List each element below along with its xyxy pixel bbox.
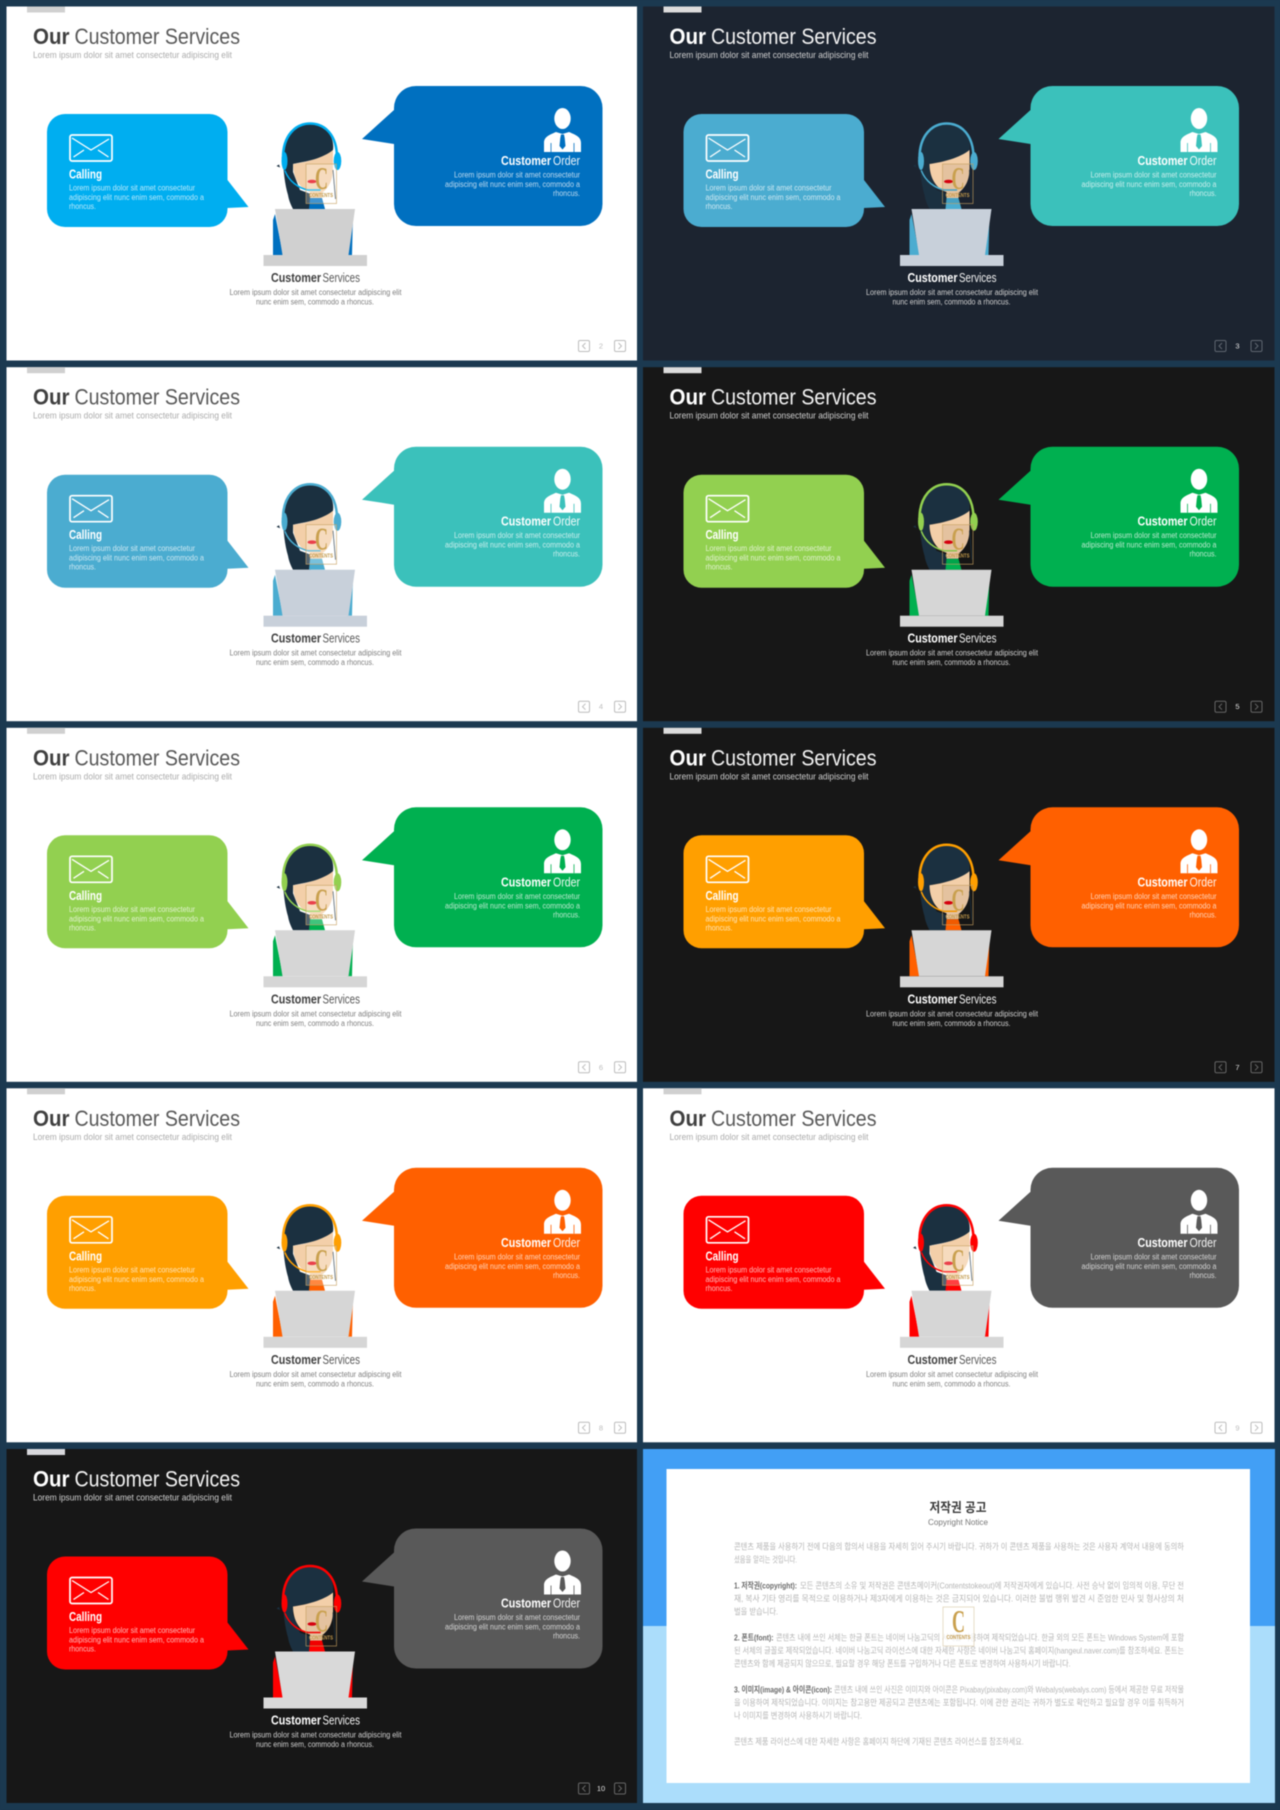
calling text: adipiscing elit nunc enim sem, commodo a (69, 914, 204, 923)
pagination: 6 (599, 1063, 603, 1072)
icon: envelope (706, 1217, 748, 1243)
speech bubble: customer order (998, 1168, 1239, 1308)
customer order text (445, 154, 580, 198)
customer services caption: Lorem ipsum dolor sit amet consectetur adipiscing elit (866, 649, 1039, 658)
customer order text: Lorem ipsum dolor sit amet consectetur (1090, 1252, 1217, 1261)
icon: envelope (70, 135, 112, 161)
copyright clause 1: 벌을 받습니다. (734, 1607, 778, 1617)
pagination (578, 701, 626, 712)
customer services caption: nunc enim sem, commodo a rhoncus. (256, 1019, 374, 1028)
customer order text: adipiscing elit nunc enim sem, commodo a (445, 901, 580, 910)
calling text (706, 528, 841, 572)
subtitle: Lorem ipsum dolor sit amet consectetur adipiscing elit (670, 50, 869, 61)
calling text: Calling (69, 1610, 102, 1624)
watermark (306, 1242, 336, 1285)
customer order text: Order (1190, 1236, 1216, 1250)
customer order text: Customer (1138, 1236, 1188, 1250)
speech bubble: calling (684, 835, 885, 948)
slide 6: white with green bubbles (6, 728, 637, 1082)
icon: businessman (1180, 469, 1218, 513)
customer services caption: Customer (908, 992, 958, 1006)
speech bubble: calling (47, 114, 248, 227)
calling text: adipiscing elit nunc enim sem, commodo a (69, 554, 204, 563)
subtitle: Lorem ipsum dolor sit amet consectetur adipiscing elit (33, 411, 232, 422)
customer order text (1082, 154, 1217, 198)
calling text (706, 168, 841, 211)
calling text: adipiscing elit nunc enim sem, commodo a (69, 193, 204, 202)
customer services caption (230, 1714, 402, 1749)
watermark: C (952, 521, 964, 557)
illustration: call-centre agent at laptop (264, 1205, 367, 1348)
customer order text: Customer (501, 154, 551, 168)
copyright clause 3 (734, 1684, 1184, 1720)
customer order text: adipiscing elit nunc enim sem, commodo a (1082, 901, 1217, 910)
icon: businessman (1180, 829, 1218, 873)
customer order text (445, 1596, 580, 1640)
customer order text: Lorem ipsum dolor sit amet consectetur (454, 892, 580, 901)
pagination: 9 (1235, 1423, 1240, 1432)
customer services caption: Lorem ipsum dolor sit amet consectetur adipiscing elit (230, 1730, 402, 1740)
customer order text: adipiscing elit nunc enim sem, commodo a (1082, 180, 1217, 189)
subtitle: Lorem ipsum dolor sit amet consectetur adipiscing elit (670, 411, 869, 422)
icon: businessman (544, 1190, 581, 1234)
copyright heading: Copyright Notice (928, 1517, 988, 1527)
customer services caption: Customer (908, 1353, 958, 1367)
watermark (942, 1242, 973, 1285)
illustration: call-centre agent at laptop (264, 1566, 367, 1708)
heading: Our (33, 1466, 70, 1492)
copyright clause 1 (734, 1581, 1184, 1617)
speech bubble: customer order (998, 86, 1239, 226)
customer order text: Order (553, 154, 580, 168)
calling text: adipiscing elit nunc enim sem, commodo a (706, 193, 841, 202)
watermark (943, 1603, 974, 1646)
customer services caption: Customer (271, 1714, 321, 1728)
customer services caption: Customer (908, 271, 958, 285)
heading: Our (33, 1106, 70, 1131)
calling text: adipiscing elit nunc enim sem, commodo a (69, 1275, 204, 1284)
customer order text: Customer (1138, 515, 1188, 529)
calling text: adipiscing elit nunc enim sem, commodo a (706, 914, 841, 923)
heading: Customer Services (711, 385, 876, 410)
icon: envelope (70, 496, 112, 522)
customer order text: Lorem ipsum dolor sit amet consectetur (1090, 531, 1217, 540)
calling text (69, 889, 204, 932)
pagination: 8 (599, 1423, 603, 1432)
speech bubble: customer order (998, 447, 1239, 587)
calling text (706, 1249, 841, 1293)
customer order text: rhoncus. (553, 910, 580, 919)
pagination: 2 (599, 342, 603, 350)
customer services caption: Services (959, 992, 996, 1006)
heading: Customer Services (74, 385, 240, 410)
calling text (706, 889, 841, 932)
subtitle: Lorem ipsum dolor sit amet consectetur adipiscing elit (670, 1132, 869, 1143)
customer services caption: nunc enim sem, commodo a rhoncus. (892, 658, 1010, 667)
customer order text: rhoncus. (1190, 550, 1216, 559)
pagination (578, 1062, 626, 1073)
pagination (1215, 1422, 1262, 1433)
customer services caption: Lorem ipsum dolor sit amet consectetur adipiscing elit (866, 1009, 1039, 1018)
customer order text: Order (553, 1236, 580, 1250)
illustration: call-centre agent at laptop (900, 124, 1004, 266)
customer order text: adipiscing elit nunc enim sem, commodo a (1082, 1262, 1217, 1271)
copyright clause 2: 된 서체의 글꼴로 제작되었습니다. 네이버 나눔고딕 라이선스에 대한 자세한 사항은 네이버 나눔고딕 홈페이지(hangeul.naver.com)를 참조하세요. 폰트는 (734, 1646, 1184, 1656)
customer services caption: Services (322, 632, 360, 646)
speech bubble: calling (684, 1196, 885, 1309)
copyright clause 1: 재, 복사 기타 영리를 목적으로 이용하거나 제3자에게 이용하는 것은 금지되어 있습니다. 이러한 불법 행위 발견 시 준엄한 민사 및 형사상의 처 (734, 1593, 1184, 1603)
watermark: CONTENTS (946, 193, 970, 199)
icon: businessman (544, 829, 581, 873)
heading: Our (670, 1106, 706, 1131)
speech bubble: calling (684, 475, 885, 588)
customer order text: Customer (501, 515, 551, 529)
pagination: 4 (599, 702, 603, 711)
calling text: adipiscing elit nunc enim sem, commodo a (706, 554, 841, 563)
calling text (69, 1249, 204, 1293)
copyright clause 3: 콘텐츠 내에 쓰인 사진은 이미지와 아이콘은 Pixabay(pixabay.com)와 Webalys(webalys.com) 등에서 제공한 무료 저작물 (834, 1684, 1184, 1694)
speech bubble: customer order (362, 447, 602, 587)
heading: Our (33, 24, 70, 49)
customer services caption: Lorem ipsum dolor sit amet consectetur adipiscing elit (866, 288, 1039, 297)
watermark: C (315, 1602, 328, 1638)
copyright clause 2 (734, 1633, 1184, 1668)
illustration: call-centre agent at laptop (900, 484, 1004, 627)
watermark: CONTENTS (309, 914, 333, 920)
heading: Customer Services (711, 24, 876, 49)
watermark: C (952, 881, 964, 917)
watermark (942, 160, 973, 204)
watermark (306, 160, 336, 204)
heading: Customer Services (74, 24, 240, 49)
heading: Customer Services (74, 1106, 240, 1131)
customer order text: rhoncus. (1190, 1271, 1216, 1280)
customer order text: Order (553, 1596, 580, 1610)
customer services caption: nunc enim sem, commodo a rhoncus. (256, 1740, 374, 1749)
slide 3: dark with teal bubbles (643, 6, 1274, 360)
copyright footer note: 콘텐츠 제품 라이선스에 대한 자세한 사항은 홈페이지 하단에 기재된 콘텐츠 라이선스를 참조하세요. (734, 1737, 1024, 1747)
customer order text: Customer (501, 875, 551, 889)
watermark (942, 521, 973, 564)
heading: Our (670, 385, 706, 410)
customer order text: Customer (501, 1236, 551, 1250)
icon: businessman (544, 1550, 581, 1594)
watermark: CONTENTS (309, 554, 333, 560)
heading: Customer Services (711, 1106, 876, 1131)
subtitle: Lorem ipsum dolor sit amet consectetur adipiscing elit (33, 1132, 232, 1143)
watermark: CONTENTS (309, 193, 333, 199)
copyright clause 2: 콘텐츠 내에 쓰인 서체는 한글 폰트는 네이버 나눔고딕의 서체를 사용하여 제작되었습니다. 한글 외의 모든 폰트는 Windows System에 포함 (776, 1633, 1184, 1643)
customer order text: Lorem ipsum dolor sit amet consectetur (454, 1252, 580, 1261)
calling text: Calling (706, 889, 738, 903)
customer services caption (866, 1353, 1039, 1388)
customer order text: adipiscing elit nunc enim sem, commodo a (445, 1262, 580, 1271)
watermark: C (315, 881, 328, 917)
speech bubble: calling (47, 1196, 248, 1309)
copyright clause 2: 2. 폰트(font): (734, 1633, 774, 1643)
customer services caption: Lorem ipsum dolor sit amet consectetur adipiscing elit (230, 288, 402, 297)
copyright clause 3: 3. 이미지(image) & 아이콘(icon): (734, 1684, 832, 1694)
speech bubble: calling (684, 114, 885, 227)
calling text: adipiscing elit nunc enim sem, commodo a (706, 1275, 841, 1284)
customer order text (1082, 875, 1217, 919)
customer order text: Order (553, 875, 580, 889)
pagination (1215, 701, 1262, 712)
watermark (306, 881, 336, 925)
customer order text (1082, 1236, 1217, 1280)
copyright heading: 저작권 공고 (930, 1500, 987, 1515)
customer services caption: Customer (271, 1353, 321, 1367)
watermark: C (315, 521, 328, 557)
customer services caption: nunc enim sem, commodo a rhoncus. (256, 1379, 374, 1388)
heading: Customer Services (74, 1466, 240, 1492)
icon: envelope (70, 1578, 112, 1604)
calling text (69, 1610, 204, 1654)
customer order text: rhoncus. (553, 1632, 580, 1640)
calling text: Calling (706, 528, 738, 542)
speech bubble: customer order (998, 807, 1239, 947)
illustration: call-centre agent at laptop (264, 845, 367, 987)
customer services caption: Services (322, 992, 360, 1006)
calling text: Lorem ipsum dolor sit amet consectetur (69, 184, 195, 192)
watermark (942, 881, 973, 925)
calling text: Lorem ipsum dolor sit amet consectetur (69, 1265, 195, 1274)
customer services caption (866, 271, 1039, 306)
customer services caption: nunc enim sem, commodo a rhoncus. (256, 658, 374, 667)
customer services caption: Services (322, 1714, 360, 1728)
illustration: call-centre agent at laptop (900, 1205, 1004, 1348)
watermark: C (952, 160, 964, 196)
customer order text: Customer (1138, 875, 1188, 889)
pagination: 7 (1235, 1063, 1240, 1072)
customer order text: adipiscing elit nunc enim sem, commodo a (445, 541, 580, 550)
speech bubble: calling (47, 1556, 248, 1670)
customer services caption: Services (959, 632, 996, 646)
speech bubble: customer order (362, 1168, 602, 1308)
icon: envelope (706, 496, 748, 522)
heading: Our (33, 385, 70, 410)
calling text: Calling (69, 889, 102, 903)
customer order text: Order (1190, 154, 1216, 168)
watermark: CONTENTS (946, 914, 970, 920)
customer order text (445, 1236, 580, 1280)
pagination: 3 (1235, 342, 1240, 350)
customer order text: rhoncus. (1190, 189, 1216, 198)
customer order text: Lorem ipsum dolor sit amet consectetur (454, 1613, 580, 1622)
customer order text: rhoncus. (553, 189, 580, 198)
copyright clause 1: 1. 저작권(copyright): (734, 1581, 797, 1591)
watermark: CONTENTS (309, 1636, 333, 1642)
customer services caption: Lorem ipsum dolor sit amet consectetur adipiscing elit (230, 1370, 402, 1379)
customer services caption: Customer (908, 632, 958, 646)
customer services caption (230, 1353, 402, 1388)
icon: businessman (1180, 1190, 1218, 1234)
illustration: call-centre agent at laptop (264, 484, 367, 627)
panel: copyright notice (643, 1449, 1275, 1803)
heading: Our (670, 24, 706, 49)
pagination: 10 (597, 1784, 605, 1793)
subtitle: Lorem ipsum dolor sit amet consectetur adipiscing elit (33, 1492, 232, 1504)
customer services caption (230, 992, 402, 1028)
calling text: rhoncus. (706, 563, 732, 572)
subtitle: Lorem ipsum dolor sit amet consectetur adipiscing elit (33, 771, 232, 782)
customer order text: adipiscing elit nunc enim sem, commodo a (445, 1622, 580, 1632)
calling text: adipiscing elit nunc enim sem, commodo a (69, 1636, 204, 1644)
customer order text: rhoncus. (553, 550, 580, 559)
copyright heading (928, 1500, 988, 1527)
customer order text: Lorem ipsum dolor sit amet consectetur (454, 170, 580, 180)
calling text: rhoncus. (69, 923, 96, 932)
customer order text (445, 875, 580, 919)
customer order text: Customer (1138, 154, 1188, 168)
copyright clause 1: 모든 콘텐츠의 소유 및 저작권은 콘텐츠메이커(Contentstokeout)에 저작권자에게 있습니다. 사전 승낙 없이 임의적 이용, 무단 전 (800, 1581, 1184, 1591)
customer order text: adipiscing elit nunc enim sem, commodo a (445, 180, 580, 189)
pagination (1215, 1062, 1262, 1073)
customer order text: Order (1190, 515, 1216, 529)
customer services caption (866, 992, 1039, 1028)
customer order text (445, 515, 580, 559)
slide 9: white with red and grey bubbles (643, 1088, 1274, 1442)
customer services caption: Services (959, 271, 996, 285)
calling text: Calling (706, 1249, 738, 1263)
watermark (306, 521, 336, 564)
customer services caption (230, 271, 402, 306)
customer order text: Customer (501, 1596, 551, 1610)
customer services caption: nunc enim sem, commodo a rhoncus. (256, 298, 374, 306)
watermark: CONTENTS (946, 1275, 970, 1281)
calling text (69, 528, 204, 572)
calling text: Lorem ipsum dolor sit amet consectetur (69, 905, 195, 914)
subtitle: Lorem ipsum dolor sit amet consectetur adipiscing elit (670, 771, 869, 782)
customer services caption: nunc enim sem, commodo a rhoncus. (892, 298, 1010, 306)
watermark (306, 1602, 336, 1646)
copyright intro (734, 1542, 1184, 1564)
watermark: C (315, 1242, 328, 1278)
icon: businessman (1180, 108, 1218, 152)
customer services caption: nunc enim sem, commodo a rhoncus. (892, 1379, 1010, 1388)
calling text: rhoncus. (69, 1284, 96, 1293)
calling text: rhoncus. (706, 202, 732, 211)
calling text: Lorem ipsum dolor sit amet consectetur (69, 544, 195, 553)
pagination: 5 (1235, 702, 1240, 711)
slide 5: dark with green bubbles (643, 367, 1274, 721)
copyright intro: 콘텐츠 제품을 사용하기 전에 다음의 합의서 내용을 자세히 읽어 주시기 바랍니다. 귀하가 이 콘텐츠 제품을 사용하는 것은 사용자 계약서 내용에 동의하 (734, 1542, 1184, 1552)
calling text: Calling (69, 1249, 102, 1263)
customer services caption: Services (322, 271, 360, 285)
watermark: CONTENTS (946, 554, 970, 560)
heading: Customer Services (711, 745, 876, 770)
calling text: Calling (69, 528, 102, 542)
customer order text: Order (1190, 875, 1216, 889)
speech bubble: calling (47, 835, 248, 948)
icon: envelope (706, 856, 748, 882)
watermark: CONTENTS (946, 1635, 971, 1641)
watermark: C (952, 1242, 964, 1278)
watermark: CONTENTS (309, 1275, 333, 1281)
heading: Customer Services (74, 745, 240, 770)
customer services caption: Lorem ipsum dolor sit amet consectetur adipiscing elit (866, 1370, 1039, 1379)
illustration: call-centre agent at laptop (264, 124, 367, 266)
calling text: rhoncus. (69, 1644, 96, 1654)
icon: businessman (544, 469, 581, 513)
pagination (578, 1422, 626, 1433)
calling text: Lorem ipsum dolor sit amet consectetur (706, 905, 832, 914)
customer services caption (230, 632, 402, 667)
copyright clause 3: 을 이용하여 제작되었습니다. 이미지는 참고용만 제공되고 콘텐츠에는 포함됩니다. 이에 관한 권리는 귀하가 별도로 확인하고 필요할 경우 이를 취득하거 (734, 1697, 1184, 1707)
customer services caption: Services (322, 1353, 360, 1367)
customer services caption (866, 632, 1039, 667)
pagination (1215, 340, 1262, 352)
customer services caption: Lorem ipsum dolor sit amet consectetur adipiscing elit (230, 1009, 402, 1018)
customer order text (1082, 515, 1217, 559)
calling text: rhoncus. (706, 1284, 732, 1293)
slide 10: dark with red and grey bubbles (6, 1449, 637, 1803)
slide 8: white with orange bubbles (6, 1088, 637, 1442)
calling text: rhoncus. (706, 923, 732, 932)
customer order text: Lorem ipsum dolor sit amet consectetur (1090, 170, 1217, 180)
calling text: Lorem ipsum dolor sit amet consectetur (706, 184, 832, 192)
customer order text: adipiscing elit nunc enim sem, commodo a (1082, 541, 1217, 550)
calling text (69, 168, 204, 211)
customer services caption: Customer (271, 992, 321, 1006)
calling text: Lorem ipsum dolor sit amet consectetur (706, 1265, 832, 1274)
heading: Our (670, 745, 706, 770)
icon: envelope (70, 856, 112, 882)
customer order text: Lorem ipsum dolor sit amet consectetur (454, 531, 580, 540)
subtitle: Lorem ipsum dolor sit amet consectetur adipiscing elit (33, 50, 232, 61)
slide 4: white with teal bubbles (6, 367, 637, 721)
speech bubble: customer order (362, 807, 602, 947)
watermark: C (952, 1603, 965, 1639)
calling text: rhoncus. (69, 202, 96, 211)
customer services caption: Customer (271, 632, 321, 646)
watermark: C (315, 160, 328, 196)
speech bubble: customer order (362, 86, 602, 226)
customer services caption: nunc enim sem, commodo a rhoncus. (892, 1019, 1010, 1028)
customer order text: Order (553, 515, 580, 529)
speech bubble: customer order (362, 1528, 602, 1668)
customer services caption: Lorem ipsum dolor sit amet consectetur adipiscing elit (230, 649, 402, 658)
copyright clause 3: 나 이미지를 변경하여 사용하시기 바랍니다. (734, 1710, 862, 1720)
calling text: Lorem ipsum dolor sit amet consectetur (69, 1626, 195, 1635)
customer services caption: Services (959, 1353, 996, 1367)
calling text: Calling (69, 168, 102, 182)
pagination (578, 340, 626, 352)
heading: Our (33, 745, 70, 770)
calling text: Calling (706, 168, 738, 182)
customer services caption: Customer (271, 271, 321, 285)
pagination (578, 1783, 626, 1794)
copyright intro: 셨음을 알리는 것입니다. (734, 1554, 797, 1564)
icon: envelope (70, 1217, 112, 1243)
illustration: call-centre agent at laptop (900, 845, 1004, 987)
slide 2: white with blue bubbles (6, 6, 637, 360)
copyright clause 2: 콘텐츠와 함께 제공되지 않으므로, 필요할 경우 해당 폰트를 구입하거나 다른 폰트로 변경하여 사용하시기 바랍니다. (734, 1658, 1071, 1668)
icon: envelope (706, 135, 748, 161)
customer order text: rhoncus. (1190, 910, 1216, 919)
slide 7: dark with orange bubbles (643, 728, 1274, 1082)
customer order text: Lorem ipsum dolor sit amet consectetur (1090, 892, 1217, 901)
calling text: Lorem ipsum dolor sit amet consectetur (706, 544, 832, 553)
speech bubble: calling (47, 475, 248, 588)
calling text: rhoncus. (69, 563, 96, 572)
icon: businessman (544, 108, 581, 152)
customer order text: rhoncus. (553, 1271, 580, 1280)
